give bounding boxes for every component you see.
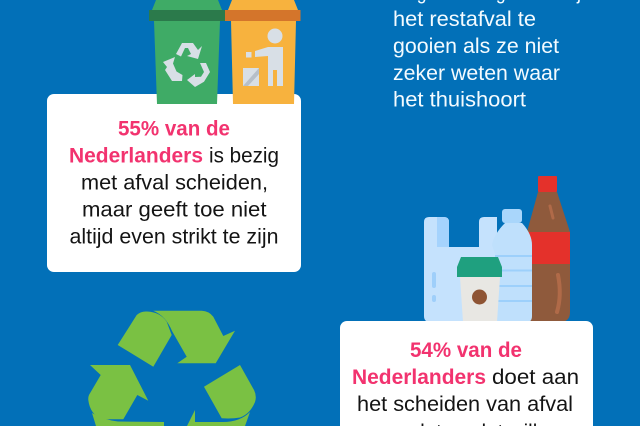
text block: card body: doet aan: [492, 366, 579, 389]
text block: card body: Nederlanders: [352, 366, 486, 389]
text block: card body: maar geeft toe niet: [82, 198, 267, 222]
icon: green recycling bin: [149, 0, 225, 104]
text block: card body: het scheiden van afval: [357, 393, 573, 416]
heading: 55 percent: 55% van de: [118, 118, 230, 140]
text block: restafval statement: het thuishoort: [393, 88, 526, 112]
panel: card about 54 percent: [340, 321, 593, 426]
icon: cola bottle: [526, 176, 570, 322]
text block: restafval statement: zeker weten waar: [393, 62, 560, 85]
text block: card body: is bezig: [209, 144, 279, 168]
icon: coffee cup: [457, 257, 502, 322]
text block: card body: [69, 144, 279, 248]
icon: large green recycling symbol: [88, 311, 256, 426]
text block: restafval statement: [393, 0, 581, 112]
icon: person throwing away trash: [243, 28, 283, 86]
text block: card body: [352, 366, 579, 426]
text block: card body: altijd even strikt te zijn: [70, 226, 278, 248]
text block: restafval statement: het restafval te: [393, 8, 536, 31]
text block: card body: met afval scheiden,: [81, 172, 268, 194]
icon: plastic waste group: [424, 176, 570, 322]
icon: recycling arrows on bin: [163, 43, 210, 87]
icon: plastic bag: [424, 217, 497, 322]
text block: card body: Nederlanders: [69, 144, 203, 168]
text block: restafval statement: gooien als ze niet: [393, 35, 559, 58]
icon: orange waste bin: [225, 0, 300, 104]
panel: card about 55 percent: [47, 94, 301, 272]
icon: water bottle: [492, 209, 532, 322]
heading: 54 percent: 54% van de: [410, 339, 522, 362]
